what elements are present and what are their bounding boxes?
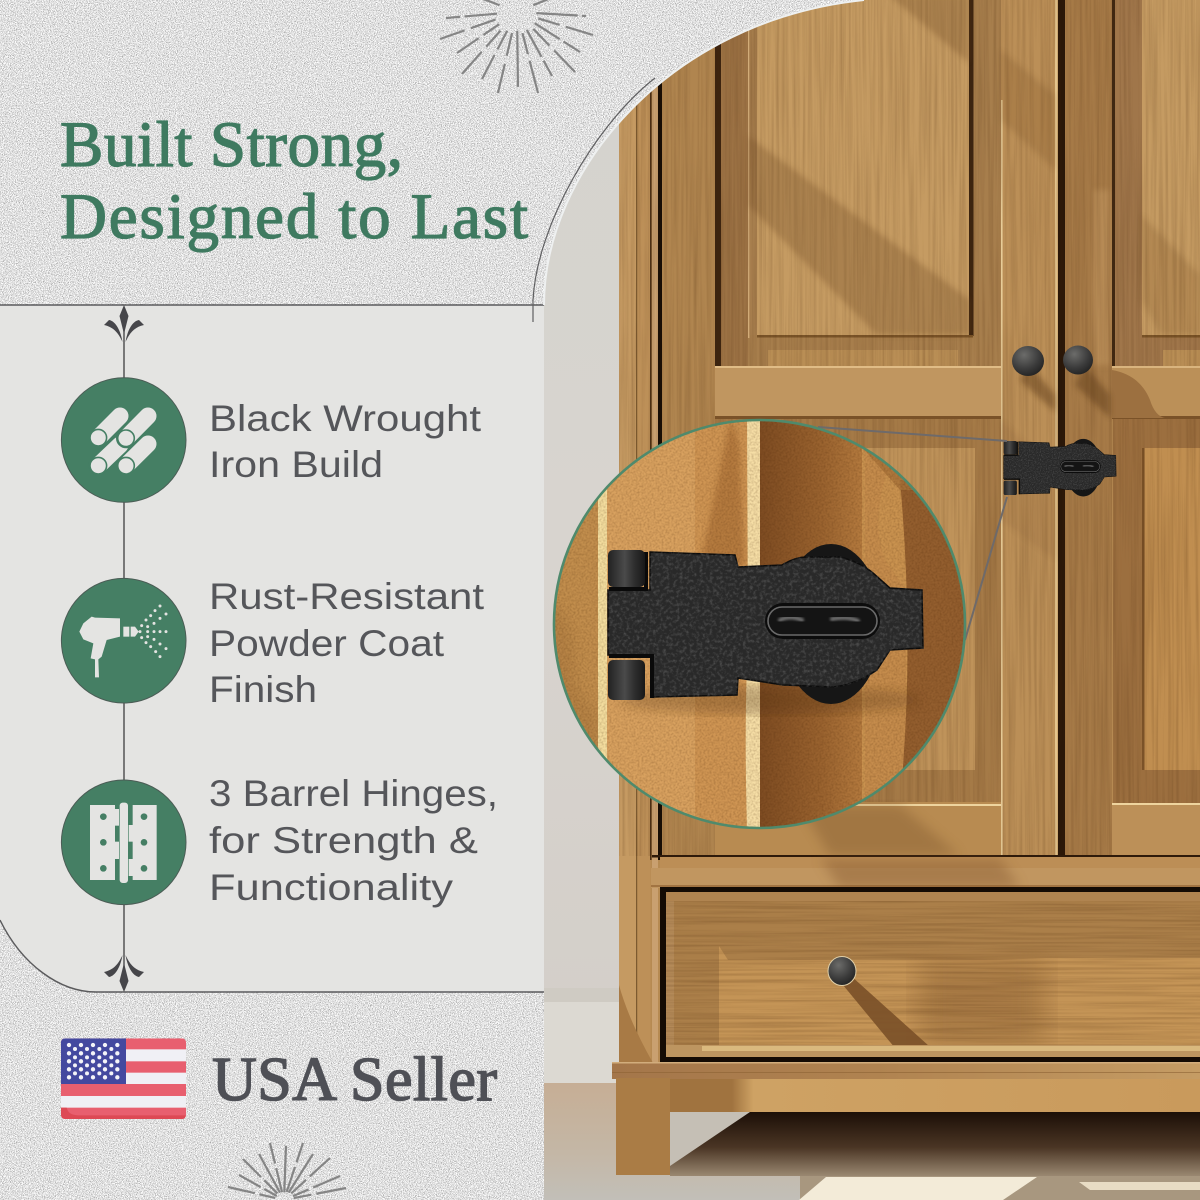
door 2 recess and panel	[1112, 0, 1200, 366]
callout: magnified hasp	[550, 415, 970, 835]
text: black wrought iron build: Black Wrought	[209, 398, 482, 439]
magnified hasp shadow	[620, 686, 920, 714]
diagonal light shadows	[748, 0, 1200, 560]
cabinet side strips	[619, 106, 636, 1030]
bottom rails	[715, 802, 1001, 856]
lower door recess 1	[715, 418, 1001, 806]
text: black wrought iron build: Iron Build	[209, 444, 383, 485]
foot	[616, 1078, 670, 1175]
magnified hasp	[608, 544, 923, 704]
text: 3 barrel hinges: Functionality	[209, 867, 454, 908]
wall	[544, 124, 619, 988]
stiles	[1001, 0, 1055, 856]
dark groove	[760, 415, 862, 835]
icon: barrel hinge	[61, 780, 186, 905]
text: 3 barrel hinges	[209, 773, 498, 908]
photo: wooden cabinet	[544, 0, 1200, 1200]
text: rust-resistant powder coat finish: Rust-Resistant	[209, 576, 485, 617]
drawer knob shadow	[844, 979, 928, 1045]
cream stripe centre	[746, 420, 760, 830]
lock rails	[715, 366, 1001, 418]
upper right panel	[865, 450, 912, 490]
ornament bottom	[104, 955, 144, 992]
floor	[544, 1083, 800, 1200]
arc line	[533, 78, 655, 322]
apron	[662, 1079, 1200, 1112]
door 1 recess	[748, 335, 974, 366]
text: black wrought iron build	[209, 398, 482, 485]
ornament top	[104, 305, 144, 342]
title	[60, 109, 528, 253]
usa seller label: USA Seller	[212, 1046, 497, 1114]
title: Designed to Last	[60, 181, 528, 253]
cabinet base body	[637, 0, 1113, 1062]
title: Built Strong,	[60, 109, 403, 181]
door knobs shadows	[1020, 365, 1110, 418]
features panel background	[0, 305, 544, 992]
cream stripe left	[598, 489, 607, 758]
shadow on lower rail	[800, 805, 960, 856]
left wood	[550, 415, 598, 835]
icon: powder coat spray gun	[61, 578, 186, 703]
icon: usa flag	[61, 1038, 186, 1119]
text: rust-resistant powder coat finish: Powder Coat	[209, 623, 445, 664]
timeline with ornaments	[104, 305, 144, 992]
connector lines	[818, 427, 1007, 640]
small hasp on door	[1004, 439, 1116, 496]
lower door recess 2	[1113, 418, 1200, 806]
right door knob	[1063, 346, 1093, 374]
text: 3 barrel hinges: 3 Barrel Hinges,	[209, 773, 498, 814]
light panel edge	[862, 450, 906, 820]
photo edge halo	[544, 0, 864, 305]
text: rust-resistant powder coat finish: Finish	[209, 669, 317, 710]
vertical grain overlay	[619, 0, 1200, 856]
drawer knob	[828, 956, 856, 986]
starburst top	[440, 0, 593, 93]
left door knob	[1012, 346, 1044, 376]
lower moulding	[666, 1045, 1200, 1057]
drawer	[660, 887, 1200, 1063]
centre left wood	[607, 432, 695, 816]
top moulding	[652, 855, 1200, 858]
starburst bottom	[228, 1143, 346, 1200]
left post	[662, 0, 715, 856]
text: rust-resistant powder coat finish	[209, 576, 485, 710]
lens ring	[554, 420, 965, 828]
icon: iron bars	[61, 378, 186, 502]
text: 3 barrel hinges: for Strength &	[209, 820, 478, 861]
door 1 raised panel	[757, 0, 969, 335]
right dark wood	[900, 480, 964, 768]
wood speckle overlay	[554, 420, 965, 830]
